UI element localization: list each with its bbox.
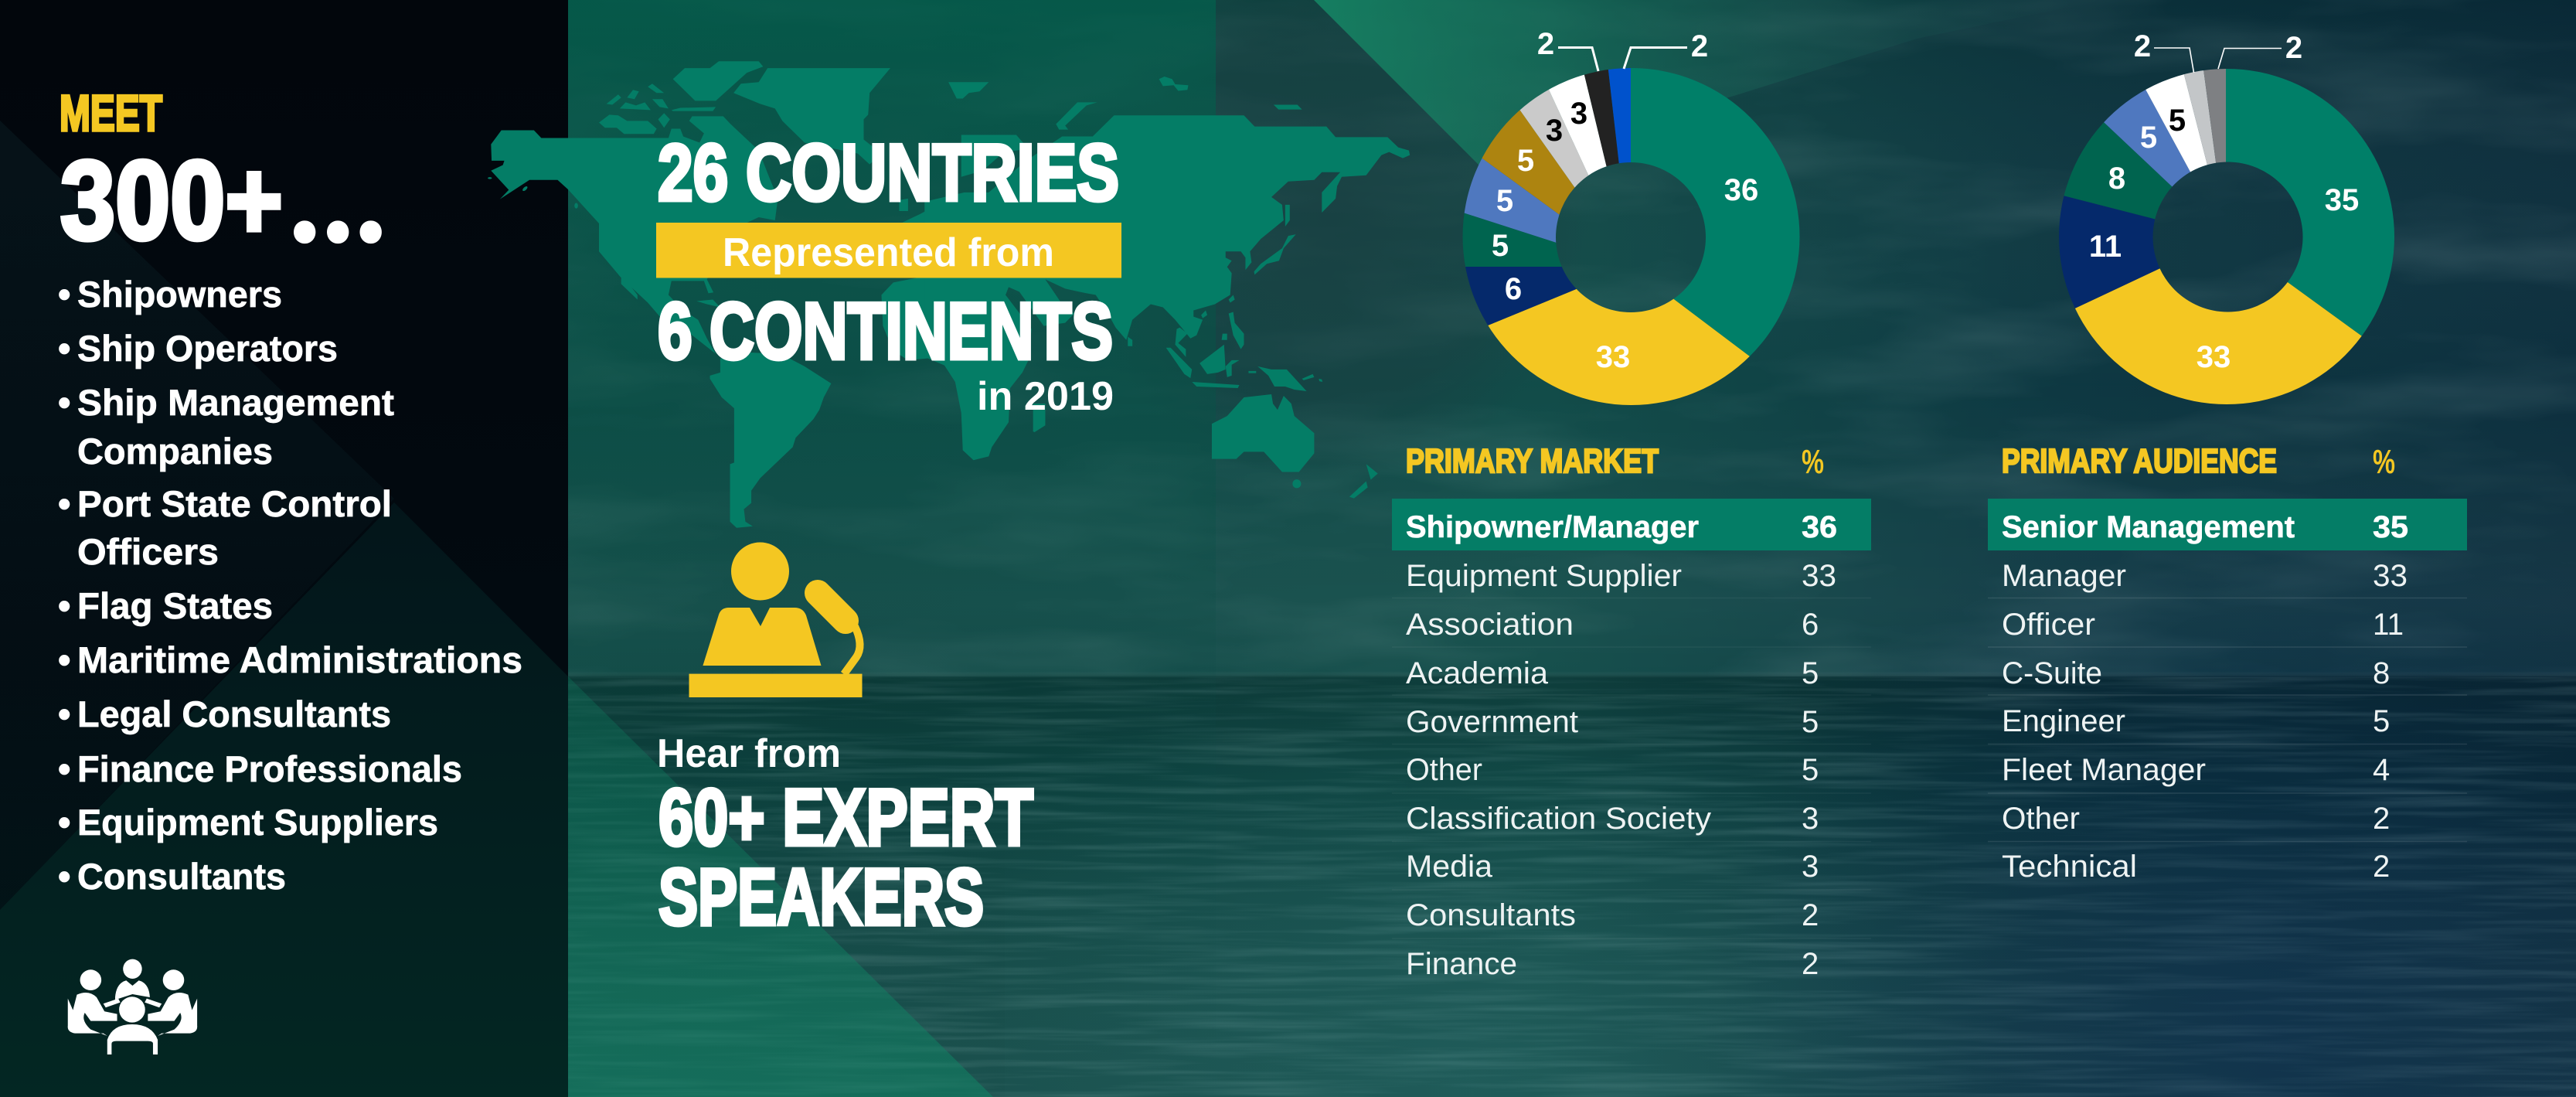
row: Finance: Finance bbox=[1406, 947, 1517, 981]
donut values: 2 bbox=[1691, 29, 1708, 63]
highlighted row: Senior Management: 35 bbox=[2373, 510, 2408, 544]
audience bullet list: Companies bbox=[77, 431, 273, 472]
table: primary market bbox=[1392, 442, 1871, 981]
heading: 300+... bbox=[60, 103, 390, 277]
highlighted row: Shipowner/Manager: 36 bbox=[1802, 510, 1837, 544]
heading: SPEAKERS: SPEAKERS bbox=[658, 853, 984, 942]
audience bullet list: Legal Consultants bbox=[77, 693, 391, 734]
donut values: 3 bbox=[1570, 97, 1587, 131]
text: in 2019: in 2019 bbox=[977, 374, 1114, 419]
row: Manager: Manager bbox=[2002, 559, 2126, 593]
audience bullet list: • bbox=[58, 693, 70, 734]
row: Consultants: 2 bbox=[1802, 898, 1819, 932]
icon: speaker at podium bbox=[689, 543, 863, 697]
audience bullet list: Consultants bbox=[77, 856, 286, 897]
audience bullet list: Equipment Suppliers bbox=[77, 802, 438, 843]
audience bullet list: Port State Control bbox=[77, 483, 392, 524]
row: Manager bbox=[2002, 559, 2408, 593]
donut values: 5 bbox=[1492, 229, 1509, 263]
banner: Represented from: Represented from bbox=[723, 230, 1054, 275]
audience bullet list: • bbox=[58, 856, 70, 897]
donut values: 5 bbox=[1496, 184, 1513, 218]
row: Technical bbox=[2002, 850, 2390, 884]
row: Association bbox=[1406, 608, 1819, 642]
audience bullet list: • bbox=[58, 639, 70, 680]
panel: left audience list bbox=[58, 84, 522, 1054]
row: Government: 5 bbox=[1802, 705, 1819, 739]
donut values: 2 bbox=[2134, 29, 2151, 63]
donut chart: primary audience bbox=[2059, 35, 2394, 404]
donut values: 5 bbox=[1517, 144, 1534, 178]
row: Other: 5 bbox=[1802, 753, 1819, 787]
banner: Represented from bbox=[656, 223, 1121, 278]
donut values: 2 bbox=[1537, 27, 1554, 61]
row: Academia: 5 bbox=[1802, 656, 1819, 690]
row: Media: Media bbox=[1406, 850, 1493, 884]
row: Media bbox=[1406, 850, 1819, 884]
donut chart: primary market bbox=[1462, 32, 1799, 405]
donut values: 5 bbox=[2169, 104, 2186, 138]
audience bullet list: Shipowners bbox=[77, 274, 282, 315]
row: Officer: 11 bbox=[2373, 608, 2404, 642]
world map bbox=[488, 61, 1410, 528]
icon: people around a table bbox=[68, 959, 197, 1054]
donut values: 3 bbox=[1546, 114, 1563, 148]
row: Fleet Manager: 4 bbox=[2373, 753, 2390, 787]
row: Government: Government bbox=[1406, 705, 1578, 739]
donut values: 36 bbox=[1724, 173, 1758, 207]
audience bullet list: Ship Management bbox=[77, 382, 394, 423]
table header: PRIMARY AUDIENCE bbox=[2002, 442, 2277, 480]
row: Academia bbox=[1406, 656, 1819, 690]
row: Technical: 2 bbox=[2373, 850, 2390, 884]
callout: speakers bbox=[657, 731, 1033, 942]
donut values bbox=[2089, 29, 2359, 374]
row: Technical: Technical bbox=[2002, 850, 2137, 884]
row: C-Suite bbox=[2002, 656, 2390, 690]
row: C-Suite: C-Suite bbox=[2002, 656, 2102, 690]
callout: countries and continents bbox=[656, 128, 1121, 419]
highlighted row: Shipowner/Manager bbox=[1392, 499, 1871, 550]
heading: MEET: MEET bbox=[60, 84, 162, 141]
table header: % bbox=[1802, 443, 1824, 481]
row: Officer: Officer bbox=[2002, 608, 2095, 642]
audience bullet list: • bbox=[58, 748, 70, 789]
donut values: 35 bbox=[2325, 183, 2359, 217]
donut values: 8 bbox=[2108, 162, 2125, 196]
row: Consultants: Consultants bbox=[1406, 898, 1576, 932]
highlighted row: Shipowner/Manager: Shipowner/Manager bbox=[1406, 510, 1699, 544]
row: Association: Association bbox=[1406, 608, 1574, 642]
table header: PRIMARY MARKET bbox=[1406, 442, 1659, 480]
donut values: 33 bbox=[1596, 340, 1630, 374]
row: Manager: 33 bbox=[2373, 559, 2408, 593]
audience bullet list: Officers bbox=[77, 531, 219, 572]
row: Engineer: 5 bbox=[2373, 704, 2390, 738]
audience bullet list: • bbox=[58, 328, 70, 369]
highlighted row: Senior Management: Senior Management bbox=[2002, 510, 2295, 544]
table header: % bbox=[2373, 443, 2395, 481]
row: Other: 2 bbox=[2373, 802, 2390, 836]
row: Other: Other bbox=[2002, 802, 2080, 836]
highlighted row: Senior Management bbox=[1988, 499, 2467, 550]
row: Consultants bbox=[1406, 898, 1819, 932]
audience bullet list: Flag States bbox=[77, 585, 273, 626]
row: Equipment Supplier: 33 bbox=[1802, 559, 1836, 593]
row: Fleet Manager bbox=[2002, 753, 2390, 787]
audience bullet list: • bbox=[58, 483, 70, 524]
row: Academia: Academia bbox=[1406, 656, 1549, 690]
row: Government bbox=[1406, 705, 1819, 739]
row: Finance: 2 bbox=[1802, 947, 1819, 981]
text: Hear from: Hear from bbox=[657, 731, 841, 776]
table: primary audience bbox=[1988, 442, 2467, 884]
row: Classification Society: 3 bbox=[1802, 802, 1819, 836]
audience bullet list: Finance Professionals bbox=[77, 748, 462, 789]
row: Equipment Supplier bbox=[1406, 559, 1836, 593]
donut values: 2 bbox=[2285, 31, 2302, 65]
donut values: 33 bbox=[2197, 340, 2231, 374]
heading: 26 COUNTRIES: 26 COUNTRIES bbox=[658, 128, 1119, 218]
row: Classification Society: Classification Society bbox=[1406, 802, 1711, 836]
row: Officer bbox=[2002, 608, 2404, 642]
row: C-Suite: 8 bbox=[2373, 656, 2390, 690]
Europe, Africa, Asia and Oceania bbox=[924, 77, 1410, 499]
row: Engineer: Engineer bbox=[2002, 704, 2125, 738]
heading: 300+...: 300+ bbox=[60, 138, 283, 263]
row: Other bbox=[2002, 802, 2390, 836]
donut values bbox=[1492, 27, 1758, 374]
heading: 6 CONTINENTS: 6 CONTINENTS bbox=[658, 287, 1113, 376]
row: Engineer bbox=[2002, 704, 2390, 738]
audience bullet list: • bbox=[58, 585, 70, 626]
row: Other: Other bbox=[1406, 753, 1482, 787]
row: Association: 6 bbox=[1802, 608, 1819, 642]
donut values: 5 bbox=[2140, 121, 2157, 155]
leader lines bbox=[1558, 48, 1687, 71]
audience bullet list: Ship Operators bbox=[77, 328, 338, 369]
audience bullet list: • bbox=[58, 274, 70, 315]
audience bullet list bbox=[58, 274, 522, 897]
audience bullet list: Maritime Administrations bbox=[77, 639, 522, 680]
donut values: 11 bbox=[2089, 230, 2122, 264]
row: Equipment Supplier: Equipment Supplier bbox=[1406, 559, 1682, 593]
audience bullet list: • bbox=[58, 382, 70, 423]
row: Finance bbox=[1406, 947, 1819, 981]
row: Fleet Manager: Fleet Manager bbox=[2002, 753, 2206, 787]
heading: 60+ EXPERT: 60+ EXPERT bbox=[658, 773, 1033, 863]
row: Other bbox=[1406, 753, 1819, 787]
heading: 300+...: ... bbox=[285, 103, 390, 277]
row: Media: 3 bbox=[1802, 850, 1819, 884]
Americas bbox=[488, 61, 943, 528]
audience bullet list: • bbox=[58, 802, 70, 843]
donut values: 6 bbox=[1505, 272, 1522, 306]
leader lines bbox=[2154, 48, 2282, 73]
